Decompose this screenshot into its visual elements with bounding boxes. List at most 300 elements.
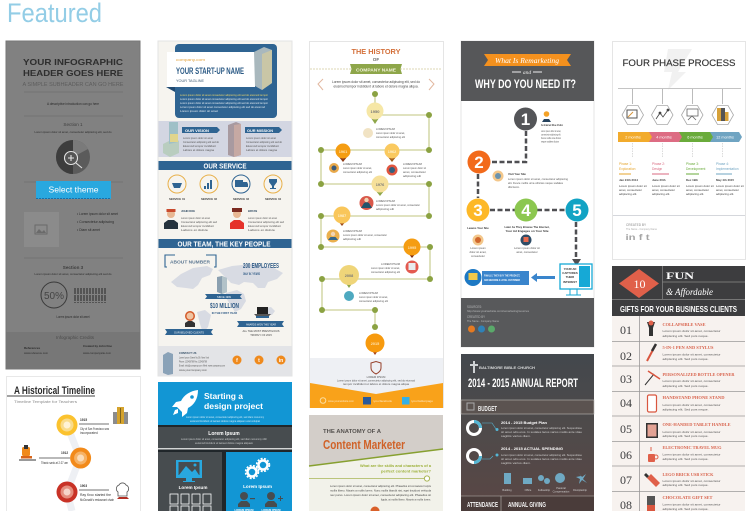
vision text: Eiusmod tempor incididunt	[183, 144, 216, 148]
history heading: OF	[373, 57, 379, 62]
service icons	[168, 175, 282, 201]
1903 marker: McDonald's restaurant chain	[80, 498, 114, 502]
phase 4: amet, consectetur	[716, 188, 739, 192]
design project intro: Lorem ipsum dolor sit amet, consectetur adipiscing elit, sed diam nonummy	[186, 415, 265, 419]
portrait 1950: LOREM IPSUM	[376, 127, 396, 131]
hero body text: Lorem ipsum dolor sit amet consectetur adipiscing elit sed do eiusmod tempor	[180, 93, 268, 97]
laptop icon	[254, 307, 271, 318]
icon: gears	[246, 458, 270, 478]
step 5	[566, 198, 588, 222]
monitor ad icon	[560, 264, 592, 295]
bullet list: • Consectetur adipiscing	[77, 220, 114, 224]
anatomy body text: nec purus. Lorem ipsum dolor sit amet, consectetur adipiscing elit. Phasellus sit	[330, 493, 431, 497]
file icons	[170, 494, 211, 511]
vision text	[183, 136, 219, 152]
contact text: Phone: 123456789 Fax: 123456789	[179, 360, 207, 364]
entry 1976: LOREM IPSUM	[376, 199, 396, 203]
footer text: Lorem ipsum dolor sit amet, consectetur adipiscing elit, sed do eiusmod	[337, 378, 415, 382]
phase 1: Exploration	[619, 167, 636, 171]
step 4 icon and text: Your Ad Engages on Your Site	[506, 229, 549, 233]
card 1 title: HEADER GOES HERE	[23, 68, 123, 78]
pin 1961	[336, 144, 350, 162]
mission building	[228, 122, 241, 157]
entry 1962	[386, 162, 426, 178]
spending category icons: Compensation	[553, 490, 570, 494]
gift row 07: LEGO BRICK USB STICK	[662, 473, 714, 477]
spending category icons: Fellowship	[538, 488, 551, 492]
church icon and name	[470, 361, 535, 373]
spending category icons: Discipleship	[573, 488, 587, 492]
anatomy body text: mollis libero. Mauris a mollis lorem. Nunc mollis blandit nisi, eget tincidunt vehicula	[330, 488, 431, 492]
1903 marker: 1903	[80, 484, 87, 488]
customer callout: AND BECOME A LOYAL CUSTOMER	[484, 278, 521, 282]
section 1 heading: Lorem ipsum dolor sit amet, consectetur adipiscing elit, sed do	[34, 130, 112, 134]
dark panel with monitor: Lorem Ipsum	[179, 485, 207, 490]
icon: building	[113, 407, 128, 424]
monitor ad icon: CAPTURES	[562, 271, 578, 275]
icon: remove user	[238, 492, 255, 507]
blue arrow	[531, 273, 555, 282]
icon: chef hat	[116, 483, 129, 499]
budget plan ring	[468, 422, 498, 434]
image placeholder	[24, 212, 59, 247]
gift row 05: ONE-HANDED TABLET HANDLE	[662, 423, 731, 427]
phone icon	[648, 395, 656, 412]
footer contacts: www.yourwebsite.com	[328, 399, 354, 403]
attendance and giving band: ATTENDANCE	[467, 500, 498, 509]
bullet list	[77, 212, 118, 232]
team member 1	[164, 209, 217, 232]
section 3 heading	[34, 265, 112, 276]
step 3: 3	[473, 201, 483, 220]
step 1 icon and text: Lorem ipsum dolor sit amet,	[541, 129, 561, 133]
anatomy question	[360, 463, 432, 474]
company name ribbon	[350, 64, 402, 74]
created by credits: The Name - Company Name	[626, 227, 658, 231]
entry 1962: adipiscing elit	[403, 174, 421, 178]
gift row 08: Lorem ipsum dolor sit amet, consectetur	[662, 502, 721, 506]
entry 2008: Lorem ipsum dolor sit amet,	[359, 295, 388, 299]
pie chart with magnifier icon	[56, 140, 90, 174]
gift row 07: 07	[620, 473, 632, 487]
pin 1995: 1995	[408, 246, 416, 250]
service 02: SERVICE 02	[201, 197, 217, 201]
step 2	[468, 150, 490, 174]
social icons: t	[258, 358, 260, 364]
team member 2: Labore et dolore	[248, 228, 276, 232]
anatomy question: perfect content marketer?	[381, 468, 432, 474]
customer callout	[464, 269, 529, 286]
gift row 02: Lorem ipsum dolor sit amet, consectetur	[662, 352, 721, 356]
annual report title: 2014 - 2015 ANNUAL REPORT	[468, 376, 578, 390]
1915 marker: incorporated	[80, 431, 98, 435]
footer contacts: /yourfacebook	[373, 399, 393, 403]
chocolate icon	[647, 496, 655, 511]
portrait 1950: consectetur adipiscing elit	[376, 135, 405, 139]
pin 2015: 2015	[371, 342, 379, 346]
anatomy body text: ligula, at mollis libero. Mauris a mollis lorem.	[381, 498, 431, 502]
step 2 icon and text: dictum.	[508, 185, 520, 189]
design project intro	[186, 415, 265, 423]
select theme button: Select theme	[48, 186, 99, 194]
step 4 icon and text: amet, consectetur	[516, 250, 538, 254]
entry 1976	[360, 196, 420, 211]
phase 3: Phase 3:	[686, 162, 699, 166]
gift row 08: adipiscing elit. Sed purs neque.	[662, 507, 709, 511]
card: four phase process	[612, 42, 746, 260]
design project heading	[204, 392, 263, 411]
step 1 icon and text	[541, 111, 563, 144]
phase 1: Phase 1:	[619, 162, 632, 166]
created by credits	[626, 223, 658, 231]
design project heading: Starting a	[204, 392, 244, 401]
1912 marker: Titanic sank at 2:27 am	[41, 461, 68, 465]
timeline path	[321, 94, 430, 327]
step 1 icon and text: neque sodales dictum	[541, 140, 560, 144]
pen icon	[647, 344, 656, 361]
pin 1961: 1961	[339, 150, 347, 154]
service 04: SERVICE 04	[265, 197, 281, 201]
gift row 02: 02	[620, 349, 632, 363]
hero body text: Lorem ipsum dolor sit amet consectetur adipiscing elit sed do eiusmod tempor	[180, 97, 268, 101]
pin 2008: 2008	[345, 274, 353, 278]
clients ribbon: OUR BELOVED CLIENTS	[174, 330, 204, 334]
gift row 06	[620, 446, 722, 462]
card 1 subheader: A SIMPLE SUBHEADER CAN GO HERE	[22, 82, 124, 88]
phase 2: Lorem ipsum dolor sit	[652, 184, 680, 188]
church icon and name: BALTIMORE BIBLE CHURCH	[479, 366, 535, 370]
step 3 icon and text	[467, 226, 489, 258]
remarketing footer: http://www.yourwebsite.com/remarketing/sources	[467, 309, 529, 313]
history intro: Lorem ipsum dolor sit amet, consectetur adipiscing elit, sed do	[332, 80, 420, 84]
actual spending text: sagittis varius diam.	[501, 461, 531, 465]
entry 1995: LOREM IPSUM	[381, 262, 401, 266]
tablet icon	[646, 423, 658, 438]
duration arrow bar: 2 months	[625, 136, 641, 140]
mission text: Lorem ipsum dolor sit amet	[246, 136, 276, 140]
team member 1: Consectetur adipiscing elit sed	[181, 220, 217, 224]
history heading: THE HISTORY	[352, 47, 401, 56]
fun heading: FUN	[666, 271, 695, 281]
history heading	[352, 47, 401, 62]
employees stat	[243, 263, 279, 276]
four phase title: FOUR PHASE PROCESS	[622, 58, 736, 68]
dark lorem ipsum strip	[158, 425, 292, 448]
gift row 03: PERSONALIZED BOTTLE OPENER	[662, 373, 735, 377]
monitor ad icon: INTEREST	[563, 280, 577, 284]
budget plan text	[501, 421, 582, 438]
card: annual report	[461, 354, 594, 511]
faint lightning watermark	[664, 49, 692, 90]
gift row 06: Lorem ipsum dolor sit amet, consectetur	[662, 452, 721, 456]
vision ribbon: OUR VISION	[185, 129, 209, 133]
dark lorem ipsum strip: Lorem ipsum dolor sit amet, consectetur adipiscing elit, sed diam nonummy nibh	[181, 437, 267, 441]
awards caption: ALL THE MOST PRESTIGIOUS	[242, 329, 280, 333]
hero body text: Lorem ipsum dolor sit amet	[180, 109, 218, 113]
phase 3: adipiscing elit.	[686, 192, 704, 196]
gift row 07: Lorem ipsum dolor sit amet, consectetur	[662, 479, 721, 483]
1915 marker	[56, 414, 109, 436]
remarketing footer: CREATED BY	[467, 315, 485, 319]
anatomy body text	[330, 484, 431, 502]
step 4	[514, 198, 538, 222]
gift row 05: Lorem ipsum dolor sit amet, consectetur	[662, 430, 721, 434]
our service banner	[158, 161, 292, 170]
footer building	[163, 352, 173, 375]
gift row 08	[620, 496, 721, 511]
phase 4: Lorem ipsum dolor sit	[716, 184, 744, 188]
portrait 1950	[363, 127, 405, 139]
beige header	[309, 415, 443, 466]
vision and mission band	[158, 121, 292, 157]
step 3	[466, 198, 490, 222]
and flourish: and	[523, 70, 531, 76]
entry 1961: consectetur adipiscing elit	[343, 170, 372, 174]
pin 1987	[334, 206, 350, 226]
step 2 icon and text: Visit Your Site	[508, 172, 526, 176]
gift row 04	[620, 395, 725, 412]
section 3 heading: Section 3	[63, 265, 84, 270]
entry 1995	[371, 260, 418, 274]
step 4 icon and text	[504, 225, 550, 254]
gift row 04: 04	[620, 396, 632, 410]
card 1 intro text: A descriptive introduction can go here	[47, 102, 99, 106]
anatomy question: What are the skills and characters of a	[360, 463, 432, 468]
pin 1995	[404, 238, 420, 258]
anatomy heading: THE ANATOMY OF A	[323, 429, 381, 435]
pin 1950	[366, 102, 384, 124]
budget plan text: 2014 - 2015 Budget Plan	[501, 421, 547, 425]
team member 1: Eiusmod tempor incididunt	[181, 224, 214, 228]
mission text: Consectetur adipiscing elit sed do	[246, 140, 282, 144]
nav chevrons	[318, 79, 434, 90]
step 1	[514, 108, 537, 130]
step 3 icon and text: consectetur	[471, 254, 485, 258]
mission text: Eiusmod tempor incididunt	[246, 144, 279, 148]
50 percent ring	[41, 282, 67, 308]
gift row 04: adipiscing elit. Sed purs neque.	[662, 408, 709, 412]
design project intro: euismod tincidunt ut laoreet dolore magna aliquam erat volutpat	[190, 419, 260, 423]
pin 2015	[366, 334, 384, 355]
gift row 05: 05	[620, 422, 632, 436]
shield icon	[371, 362, 381, 374]
vase icon	[647, 320, 655, 336]
awards ribbon: AWARDS WON THIS YEAR	[246, 322, 276, 326]
entry 2008: consectetur adipiscing elit	[359, 299, 388, 303]
entry 1961	[329, 162, 372, 174]
team banner: OUR TEAM, THE KEY PEOPLE	[178, 242, 271, 248]
social icons	[232, 356, 286, 364]
card: the history of company name	[310, 42, 444, 408]
credits band: www.reference.com	[24, 351, 48, 355]
phase 1: Lorem ipsum dolor sit	[619, 184, 647, 188]
actual spending ring	[468, 450, 498, 462]
phase 4: May 4th 2015	[716, 178, 734, 182]
1903 marker: Ray Kroc started the	[80, 493, 111, 497]
budget plan text: sagittis varius diam.	[501, 434, 531, 438]
bullet list: • Lorem ipsum dolor sit amet	[77, 212, 118, 216]
spending category icons: Building	[502, 488, 512, 492]
vision text: Lorem ipsum dolor sit amet	[183, 136, 213, 140]
budget plan text: sit amet odio eros. In sodales lacus varius mattis ante vitae	[501, 430, 582, 434]
phase 3: amet, consectetur	[686, 188, 709, 192]
entry 1995: consectetur adipiscing elit	[371, 270, 400, 274]
remarketing header: What Is Remarketing	[495, 57, 560, 65]
icon: monitor	[176, 460, 202, 482]
blue panel with gears: Lorem Ipsum	[243, 484, 272, 489]
team member 1: Labore et dolore	[181, 228, 209, 232]
monitor ad icon: YOUR AD	[564, 267, 576, 271]
service 01: SERVICE 01	[169, 197, 185, 201]
footer contacts	[320, 397, 434, 404]
bullet list: • Diam sit amet	[77, 228, 100, 232]
1915 marker: City of San Francisco was	[80, 427, 109, 431]
pictogram of people	[75, 288, 105, 303]
phase 3: Dec 19th	[686, 178, 698, 182]
spending category icons: Pastoral	[556, 486, 566, 490]
50 percent ring: 50%	[44, 291, 64, 302]
credits band: Created by John Doe	[83, 344, 112, 348]
usb icon	[644, 473, 660, 487]
phase 1: amet, consectetur	[619, 188, 642, 192]
attendance and giving band: ANNUAL GIVING	[508, 500, 546, 509]
step 3 icon and text: dolor sit amet,	[470, 250, 487, 254]
actual spending text	[501, 447, 582, 465]
card: infographic header template with select overlay	[6, 41, 140, 369]
remarketing header	[461, 41, 594, 101]
step 3 icon and text: Leaves Your Site	[467, 226, 489, 230]
duration arrow bar: 12 months	[716, 136, 734, 140]
social icons: f	[236, 358, 238, 364]
phase 2	[652, 162, 680, 196]
remarketing footer: The Name - Company Name	[467, 319, 499, 323]
gift row 01: Lorem ipsum dolor sit amet, consectetur	[662, 329, 721, 333]
employees stat: ONLY IN 7 YEARS	[243, 272, 260, 276]
company name ribbon: COMPANY NAME	[356, 68, 396, 72]
card: anatomy of a content marketer	[309, 415, 443, 511]
icon: ship	[19, 445, 36, 460]
pin 2008	[339, 265, 359, 288]
budget plan text: Lorem ipsum dolor sit amet, consectetur adipiscing elit. Suspendisse	[501, 426, 582, 430]
why title: WHY DO YOU NEED IT?	[475, 77, 576, 91]
history intro: eiusmod tempor incididunt ut labore et dolore magna aliqua.	[334, 84, 419, 88]
footer text	[337, 375, 415, 386]
team member 1: Lorem ipsum dolor sit amet	[181, 216, 210, 220]
gift row 05	[620, 422, 731, 438]
credits band: References	[24, 346, 41, 350]
anatomy body text: Lorem ipsum dolor sit amet, consectetur adipiscing elit. Phasellus sit consetetur turpis	[330, 484, 431, 488]
team member 2: Consectetur adipiscing elit sed	[248, 220, 284, 224]
gift row 06: 06	[620, 448, 632, 462]
entry 1976: Lorem ipsum dolor sit amet, consectetur	[376, 203, 420, 207]
card: starting a design project	[158, 382, 292, 511]
actual spending text: Lorem ipsum dolor sit amet, consectetur adipiscing elit. Suspendisse	[501, 453, 582, 457]
actual spending text: 2014 - 2015 ACTUAL SPENDING	[501, 447, 563, 451]
revenue stat: IN THE FIRST YEAR	[212, 311, 237, 315]
customer callout: FINALLY, THEY BUY THE PRODUCT,	[484, 274, 520, 278]
entry 1987	[326, 229, 387, 242]
gifts header	[612, 266, 745, 316]
phase 1	[619, 162, 647, 196]
gift row 03: adipiscing elit. Sed purs neque.	[662, 384, 709, 388]
hero body text: Lorem ipsum dolor sit amet consectetur adipiscing elit sed do eiusmod	[180, 105, 266, 109]
green slanted line	[309, 449, 443, 466]
awards caption	[242, 329, 280, 337]
about number heading: ABOUT NUMBER	[170, 260, 211, 266]
gift row 02	[620, 344, 721, 363]
pin 1962: 1962	[388, 150, 396, 154]
woman avatar	[185, 311, 195, 327]
credits band	[6, 332, 140, 369]
1912 marker	[39, 448, 91, 468]
duration arrow bar: 4 months	[656, 136, 672, 140]
footer contacts: /yourtwitterpage	[411, 399, 434, 403]
step 2 icon and text: elit. Fusce mollis urna ultricies neque sodales	[508, 181, 564, 185]
timeline nodes	[318, 91, 433, 330]
entry 1961: LOREM IPSUM	[343, 162, 363, 166]
entry 1962: Lorem ipsum dolor sit	[403, 166, 426, 170]
timeline title: A Historical Timeline	[14, 385, 95, 397]
attendance and giving band	[461, 496, 594, 511]
1903 marker	[56, 482, 114, 502]
footer social icons	[468, 326, 495, 332]
gift row 05: adipiscing elit. Sed purs neque.	[662, 434, 709, 438]
number 10 diamond: 10	[634, 277, 646, 291]
created by credits: CREATED BY	[626, 223, 647, 227]
entry 1987: adipiscing elit	[343, 237, 361, 241]
remarketing footer: SOURCES:	[467, 305, 482, 309]
mission text	[246, 136, 282, 152]
spending category icons: Office	[525, 488, 532, 492]
phase 4	[716, 162, 744, 196]
team member 1: JOHN DOE	[181, 209, 195, 213]
dashed connector	[478, 131, 576, 260]
entry 1995: Lorem ipsum dolor sit amet,	[371, 266, 400, 270]
step 2 icon and text: Lorem ipsum dolor sit amet, consectetur adipiscing	[508, 177, 568, 181]
revenue stat: $10 MILLION	[210, 303, 239, 310]
gift row 01: COLLAPSIBLE VASE	[662, 323, 706, 327]
timeline subtitle: Timeline Template for Teachers	[14, 399, 77, 404]
tower icon	[217, 276, 227, 294]
mission ribbon: OUR MISSION	[247, 129, 273, 133]
contact text: CONTACT US	[179, 351, 197, 355]
employees stat: 200 EMPLOYEES	[243, 263, 279, 270]
revenue stat	[210, 303, 239, 315]
budget band: BUDGET	[478, 404, 497, 413]
footer text: LOREM IPSUM	[367, 375, 386, 379]
gift row 04: Lorem ipsum dolor sit amet, consectetur	[662, 403, 721, 407]
team member 2: BRYAN	[248, 209, 257, 213]
credits band: Infographic Credits	[56, 335, 94, 340]
pin 1950: 1950	[371, 109, 380, 114]
step 2: 2	[474, 153, 484, 172]
phase 3: Lorem ipsum dolor sit	[686, 184, 714, 188]
entry 1961: Lorem ipsum dolor sit amet,	[343, 166, 372, 170]
contact text: www.yourcompany.com	[179, 368, 208, 372]
phase 4: Phase 4:	[716, 162, 729, 166]
design project heading: design project	[204, 402, 263, 411]
step 4 icon and text: Lorem ipsum dolor sit	[514, 246, 540, 250]
team member 2: Lorem ipsum dolor sit amet	[248, 216, 277, 220]
service 03: SERVICE 03	[233, 197, 249, 201]
gift row 01: adipiscing elit. Sed purs neque.	[662, 334, 709, 338]
phase 2: amet, consectetur	[652, 188, 675, 192]
team member 2: Eiusmod tempor incididunt	[248, 224, 281, 228]
gift row 06: adipiscing elit. Sed purs neque.	[662, 457, 709, 461]
step 1 icon and text: An Internet Shoe Visitor	[541, 123, 563, 127]
dark lorem ipsum strip: euismod tincidunt ut laoreet dolore magna aliquam	[195, 441, 254, 445]
mug icon	[648, 447, 658, 462]
